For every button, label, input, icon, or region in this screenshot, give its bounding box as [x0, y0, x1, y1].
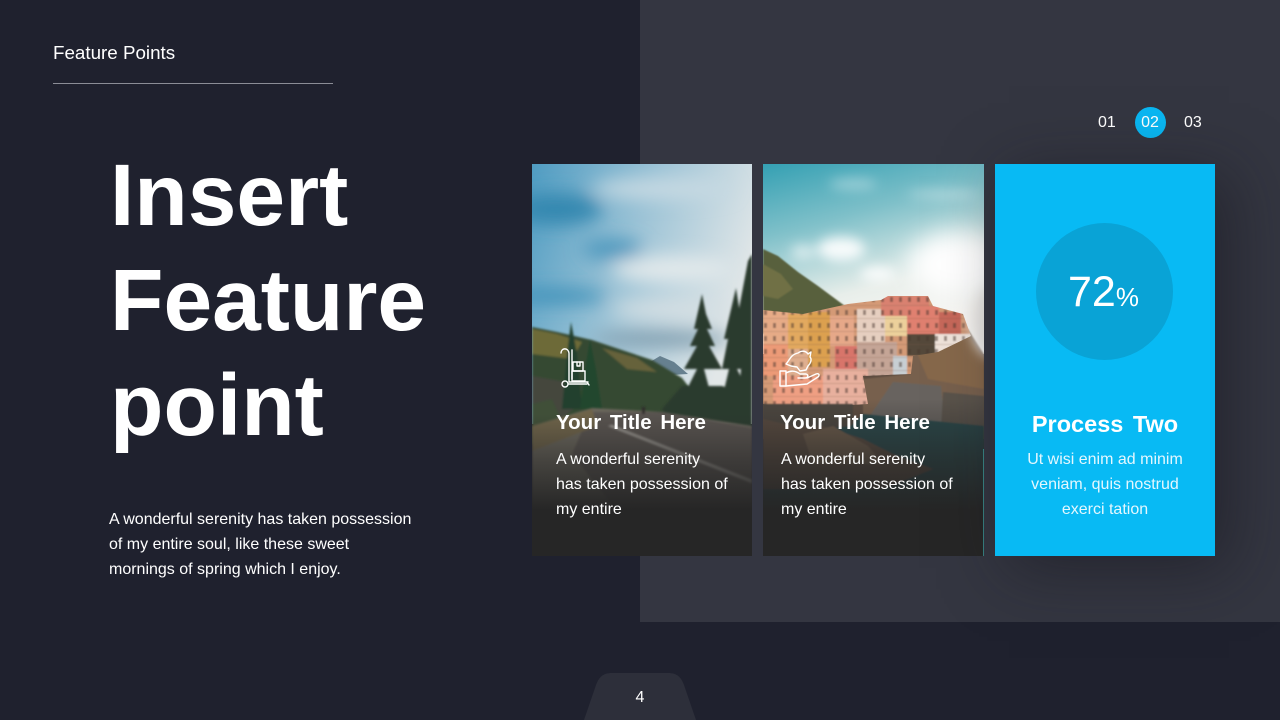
- card 2 text: A wonderful serenity: [781, 451, 925, 468]
- page 03: 03: [1184, 114, 1202, 131]
- card 3: Process Two: [995, 164, 1215, 556]
- title: point: [110, 356, 324, 454]
- card 1 text: has taken possession of: [556, 476, 728, 493]
- card 1 text: [556, 451, 728, 518]
- card 1 title: Your Title Here: [556, 411, 706, 434]
- card 1 text: my entire: [556, 501, 622, 518]
- page 01: 01: [1098, 114, 1116, 131]
- description text: [109, 511, 411, 578]
- page 02 active circle: [1135, 107, 1166, 138]
- card 3 text: [1027, 451, 1183, 518]
- header rule: [53, 83, 333, 84]
- card 3 text: exerci tation: [1062, 501, 1148, 518]
- card 2 title: Your Title Here: [780, 411, 930, 434]
- description text: mornings of spring which I enjoy.: [109, 561, 341, 578]
- card 2 text: my entire: [781, 501, 847, 518]
- tab shape: [584, 673, 696, 720]
- description text: A wonderful serenity has taken possession: [109, 511, 411, 528]
- percentage circle: [1036, 223, 1173, 360]
- card 2 text: has taken possession of: [781, 476, 953, 493]
- title: [110, 146, 426, 454]
- title: Feature: [110, 251, 426, 349]
- card 3 title: Process Two: [1032, 411, 1178, 437]
- description text: of my entire soul, like these sweet: [109, 536, 349, 553]
- header: Feature Points: Feature Points: [53, 42, 175, 63]
- photo: mountain road: [532, 164, 752, 556]
- card 3 text: veniam, quis nostrud: [1031, 476, 1179, 493]
- value 72%: 72%: [1068, 268, 1139, 316]
- card 3 text: Ut wisi enim ad minim: [1027, 451, 1183, 468]
- title: Insert: [110, 146, 348, 244]
- icon: hand truck with boxes: [560, 348, 590, 388]
- card 1 text: A wonderful serenity: [556, 451, 700, 468]
- page number tab: [584, 673, 696, 720]
- page number: 4: [636, 689, 644, 706]
- card 2 text: [781, 451, 953, 518]
- card 1: mountain road photo: [532, 164, 752, 556]
- card 2: coastal village photo: [763, 164, 984, 556]
- photo: coastal village: [763, 164, 984, 556]
- panel: right background: [640, 0, 1280, 622]
- page 02 active circle: 02: [1141, 114, 1159, 131]
- pagination: 01 02 03: [1098, 107, 1202, 138]
- icon: hand holding piggy bank: [779, 350, 820, 387]
